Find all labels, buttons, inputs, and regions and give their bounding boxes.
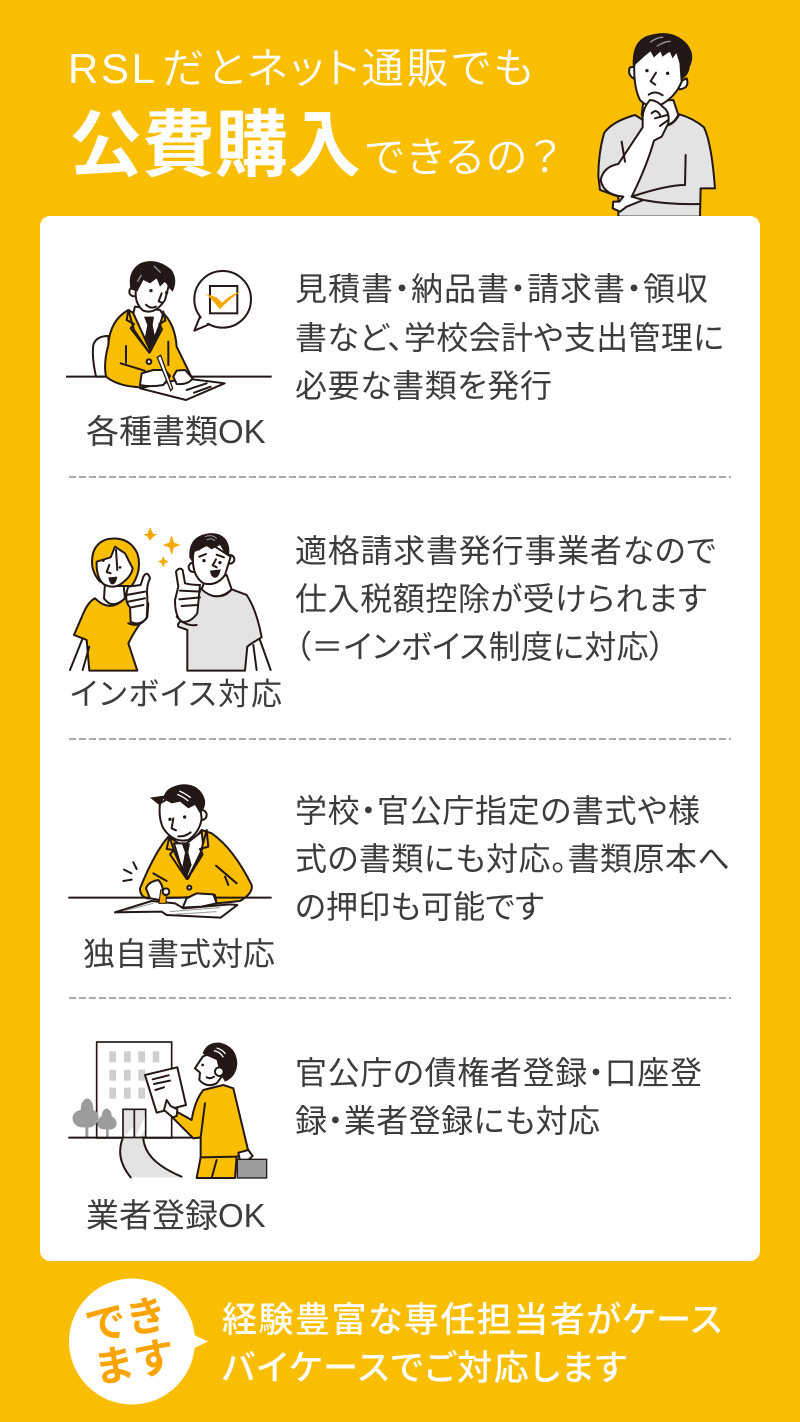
title: RSL (68, 45, 155, 92)
callout: speech bubble: ます (90, 1333, 179, 1392)
text: invoice: （＝インボイス制度に対応） (295, 629, 665, 665)
text: custom formats: 式の書類にも対応。書類原本へ (295, 841, 730, 877)
text: vendor registration (295, 1055, 702, 1139)
text: documents: 見積書・納品書・請求書・領収 (295, 271, 708, 307)
callout: speech bubble: でき (82, 1291, 170, 1350)
title (68, 45, 560, 186)
text: custom formats: 学校・官公庁指定の書式や様 (295, 793, 700, 829)
text: documents (295, 271, 724, 404)
text: invoice (295, 533, 716, 665)
text: footer message: バイケースでご対応します (222, 1349, 627, 1388)
text: footer message (222, 1301, 722, 1388)
text: footer message: 経験豊富な専任担当者がケース (222, 1301, 722, 1340)
icon: man with document by office building (68, 1042, 267, 1178)
text: custom formats: の押印も可能です (295, 889, 544, 925)
label: 独自書式対応: 独自書式対応 (83, 936, 275, 972)
icon: man stamping document (68, 784, 272, 918)
text: documents: 必要な書類を発行 (295, 368, 552, 404)
label: 各種書類OK: 各種書類OK (86, 413, 266, 450)
label: インボイス対応: インボイス対応 (70, 677, 282, 712)
text: documents: 書など、学校会計や支出管理に (295, 320, 724, 356)
text: custom formats (295, 793, 730, 925)
text: vendor registration: 官公庁の債権者登録・口座登 (295, 1055, 702, 1091)
text: invoice: 仕入税額控除が受けられます (295, 581, 707, 617)
title: できるの？ (365, 134, 560, 181)
title: だとネット通販でも (162, 45, 533, 92)
text: invoice: 適格請求書発行事業者なので (295, 533, 716, 569)
label: 業者登録OK: 業者登録OK (86, 1197, 266, 1234)
title: 公費購入 (69, 105, 361, 186)
icon: two people thumbs up (70, 527, 271, 671)
callout: speech bubble (69, 1278, 208, 1404)
icon: man signing documents (66, 261, 272, 400)
icon: thinking man (598, 34, 715, 217)
panel: card (40, 216, 760, 1261)
text: vendor registration: 録・業者登録にも対応 (295, 1103, 600, 1139)
